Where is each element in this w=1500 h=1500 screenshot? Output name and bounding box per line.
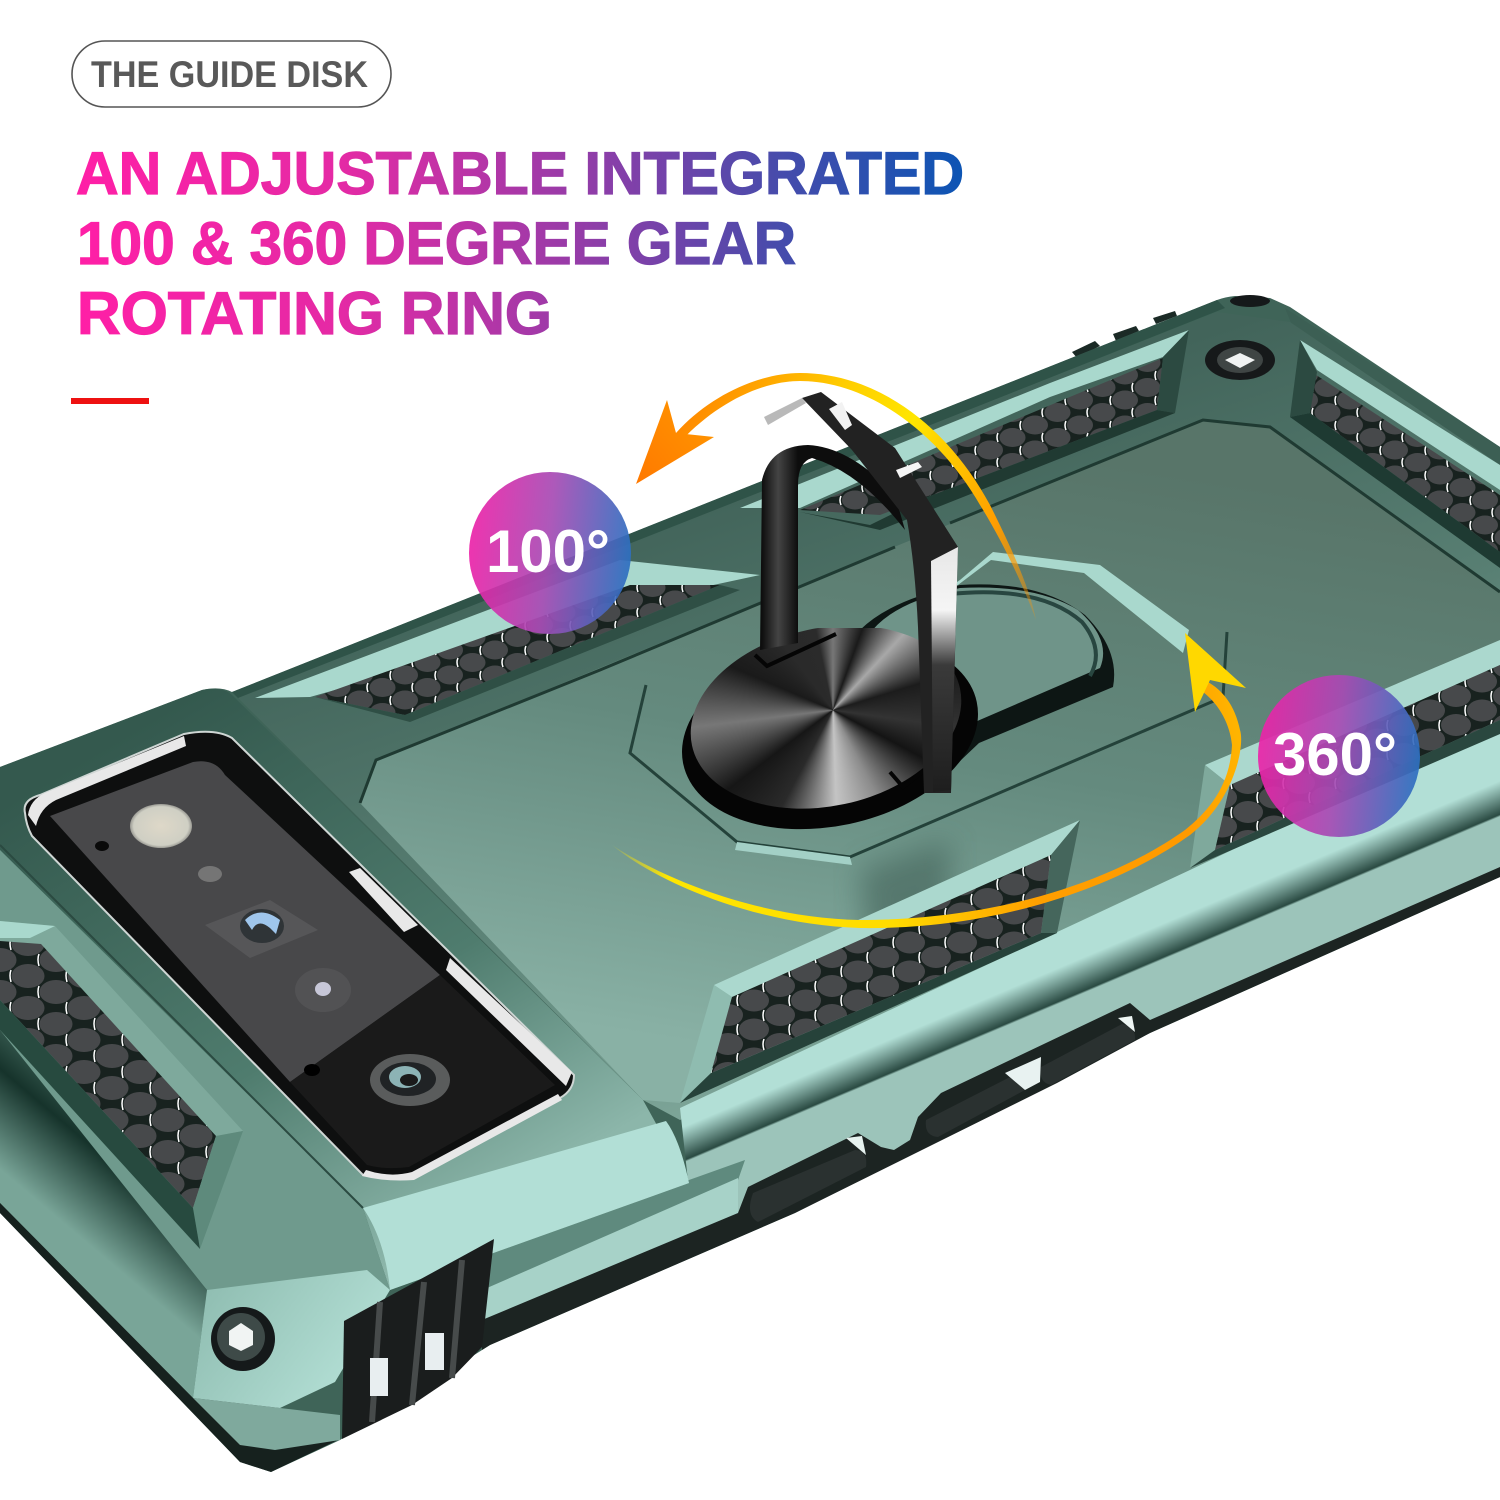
icon: telephoto lens xyxy=(370,1054,450,1106)
headline: ROTATING RING xyxy=(77,280,552,347)
headline: AN ADJUSTABLE INTEGRATED xyxy=(76,140,964,207)
icon: microphone dot xyxy=(95,841,109,851)
side buttons on top edge xyxy=(1072,311,1177,358)
honeycomb panel: upper middle xyxy=(740,330,1189,530)
lower-left side face xyxy=(0,1030,207,1398)
icon: corner screw xyxy=(211,1307,275,1371)
front band of ring xyxy=(802,392,958,793)
bottom edge dark xyxy=(0,1203,340,1472)
curved arrow: 360 degrees xyxy=(612,633,1246,928)
honeycomb panel: upper left xyxy=(255,560,760,722)
icon: flash xyxy=(130,804,192,848)
camera block xyxy=(0,689,689,1290)
oval recess xyxy=(860,584,1114,780)
recessed back plate xyxy=(360,420,1500,1103)
badge label: the guide disk: THE GUIDE DISK xyxy=(91,54,368,95)
camera window xyxy=(25,732,574,1180)
shadow cast below ring xyxy=(860,840,950,990)
badge label: the guide disk xyxy=(72,41,391,107)
honeycomb panel: left xyxy=(0,921,243,1249)
right edge band xyxy=(1285,308,1500,480)
case silhouette xyxy=(0,296,1500,1472)
badge: 360 degrees: 360° xyxy=(1273,721,1397,788)
ring top shard xyxy=(764,398,806,425)
top edge screw xyxy=(1230,295,1270,307)
lower black glass xyxy=(290,975,555,1168)
honeycomb panel: right middle xyxy=(1190,640,1500,868)
red accent bar xyxy=(71,398,149,404)
black lower rim xyxy=(482,850,1500,1350)
side button: middle xyxy=(926,1076,1025,1137)
honeycomb panel: lower centre xyxy=(680,820,1080,1103)
ring silver highlight xyxy=(931,547,958,792)
plate groove line xyxy=(360,420,1500,803)
metal camera frame xyxy=(25,732,574,1178)
icon: main lens square xyxy=(205,900,318,958)
honeycomb panel: upper right xyxy=(1290,340,1500,568)
left face below camera xyxy=(0,850,390,1290)
dark outer edge top xyxy=(232,300,1225,700)
light side band xyxy=(680,722,1500,1213)
hexagonal ring mount outline xyxy=(630,552,1227,865)
teal side below camera block xyxy=(487,1160,745,1290)
headline: 100 & 360 DEGREE GEAR xyxy=(77,210,796,277)
icon: sensor dot xyxy=(198,866,222,882)
headline xyxy=(76,140,964,347)
lower light strip xyxy=(482,1178,738,1320)
light band below camera xyxy=(363,1121,689,1290)
curved arrow: 100 degrees xyxy=(636,373,1036,620)
disc notches xyxy=(755,634,925,787)
top right screw xyxy=(1205,340,1275,380)
back arch of ring xyxy=(760,445,905,650)
brushed metal disc xyxy=(689,628,979,824)
connector port fins xyxy=(342,1239,494,1439)
corner piece xyxy=(193,1270,390,1408)
frame highlight strips xyxy=(28,736,572,1180)
badge: 100 degrees: 100° xyxy=(486,518,610,585)
badge: 360 degrees xyxy=(1258,675,1420,837)
icon: small lens xyxy=(295,968,351,1012)
rotating ring xyxy=(760,392,958,793)
phone case body xyxy=(0,295,1500,1472)
side button: upper xyxy=(1005,1016,1135,1090)
icon: lower dot xyxy=(304,1064,320,1076)
upper grey glass xyxy=(50,761,440,1082)
ring base shadow xyxy=(664,611,996,855)
crease below camera xyxy=(0,845,363,1208)
frame face xyxy=(238,312,1500,1120)
badge: 100 degrees xyxy=(469,472,631,634)
side button: lower xyxy=(750,1136,866,1222)
